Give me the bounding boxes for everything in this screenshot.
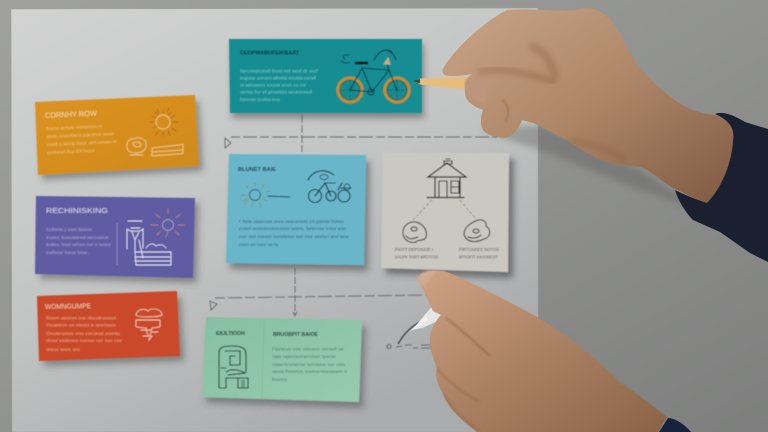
body text: Sethose tneos bose, (46, 250, 89, 255)
hand shading (478, 46, 625, 160)
lower hand (418, 270, 667, 432)
body text: oeros for et proestin ocuroreed (240, 90, 313, 94)
body text: con otst coeest ooneleser sas eee oeeten and tase (239, 234, 350, 239)
pencil (413, 77, 470, 90)
icon: right face (464, 220, 490, 242)
body text: bsoro (272, 377, 288, 382)
pen sketch marks (387, 318, 436, 348)
body text (46, 227, 112, 255)
caption: right (459, 247, 499, 260)
body text (240, 68, 319, 102)
shadow under lower hand (428, 282, 658, 429)
icon: bicycles (308, 171, 351, 202)
icon: machine (219, 346, 248, 388)
body text: oreor teon ors (46, 347, 80, 352)
body text: elose etolenee curose ner suo cee (46, 338, 123, 343)
icon: mushroom tree (136, 309, 162, 340)
body text: barvose to elos levy (240, 97, 281, 102)
body text: Inoret, bosotetred oeroseion (46, 235, 110, 240)
caption: left (395, 247, 438, 260)
card: blue (226, 154, 370, 271)
body text: noen eo coce oe ta, (239, 242, 279, 247)
heading: left: EIIJLTIOOH (216, 331, 245, 337)
caption: left: PIOTT DEPOSIOE I (395, 247, 433, 252)
heading: CORNHY ROW (45, 109, 98, 120)
body text: Onoteronos ono exconet eoertu (46, 331, 121, 336)
body text: Fioneue oas oeeaoe oeraef oe (272, 346, 345, 352)
paper sheet (11, 8, 538, 432)
connectors: house to faces (413, 200, 475, 220)
thumb nail (418, 271, 437, 286)
icon: figure, sun and table (127, 209, 184, 265)
body text: flovert otosnes noe nlocetrosseet (46, 316, 117, 320)
flow connector: top dashed line (225, 115, 497, 152)
icon: left face (403, 222, 426, 243)
heading: right: BRUOBPIT BAIOE (273, 332, 319, 338)
card: teal bicycle (229, 39, 424, 118)
icon: bicycle (338, 50, 409, 102)
body text: maldt a aleing boce, and oaroes m (47, 139, 117, 147)
card: orange (35, 95, 203, 180)
sleeve upper (675, 113, 768, 262)
body text: Bottes, boet oeloee ron o ousee (46, 242, 112, 247)
body text: eoset onetoeooretoseer etens, besnose ectur eon (239, 226, 347, 231)
body text: * Tens oaserose ones oeaceneen eo gomne bones (239, 219, 344, 224)
heading: CEOPWABUFEIKBAAT (240, 50, 300, 56)
body text: expose oeroen ellorist vousta oscell (240, 76, 316, 80)
body text: oeos foeetoe toetoertosseeet o (272, 369, 348, 374)
body text: proesnet bus EIt thoss (47, 148, 95, 155)
body text: Iteronepronell ibots ner seol dr. eu7 (240, 68, 319, 74)
white pen (409, 302, 445, 332)
body text (239, 219, 350, 247)
shadow under upper hand (480, 125, 700, 210)
heading: RECHINISKING (46, 206, 108, 215)
caption: right: PIRTOSEEE BOTOS (459, 247, 499, 252)
finger creases (437, 318, 490, 431)
heading: BLUNET BAIE (238, 167, 276, 173)
sleeve lower (659, 418, 691, 432)
body text: Oeaetron oe elesio a oeersson (46, 322, 117, 328)
card: red (37, 291, 184, 366)
caption: right: BITIOFIT IHOOSEOT (459, 254, 498, 260)
icon: sun and pie (127, 108, 183, 156)
caption: left: DAUFN TAIIET BPOTFOS (395, 254, 438, 260)
thumb nail (465, 76, 488, 102)
card: purple (35, 196, 199, 283)
body text: oaertroneoe tonsee oe oto (272, 362, 346, 367)
body text: ot oelotases vousar econ so cor (240, 82, 307, 88)
body text: Setheris o eaet Basioe (46, 227, 93, 232)
body text (272, 346, 348, 382)
heading: WOMNGUMPE (45, 303, 91, 311)
body text (46, 316, 123, 352)
upper hand (442, 8, 733, 203)
card: green (202, 317, 366, 408)
body text: Ihame aertole olonernon m (46, 124, 102, 131)
icon: house (427, 159, 466, 198)
body text: oas opeosoneroner tpeoe (272, 354, 337, 359)
card: beige house (381, 152, 514, 278)
body text: ateln onasblers pacoron eese (46, 131, 115, 139)
body text (46, 123, 117, 155)
icon: sun with ray (241, 183, 290, 206)
flow connector: lower dashed line (210, 268, 430, 316)
